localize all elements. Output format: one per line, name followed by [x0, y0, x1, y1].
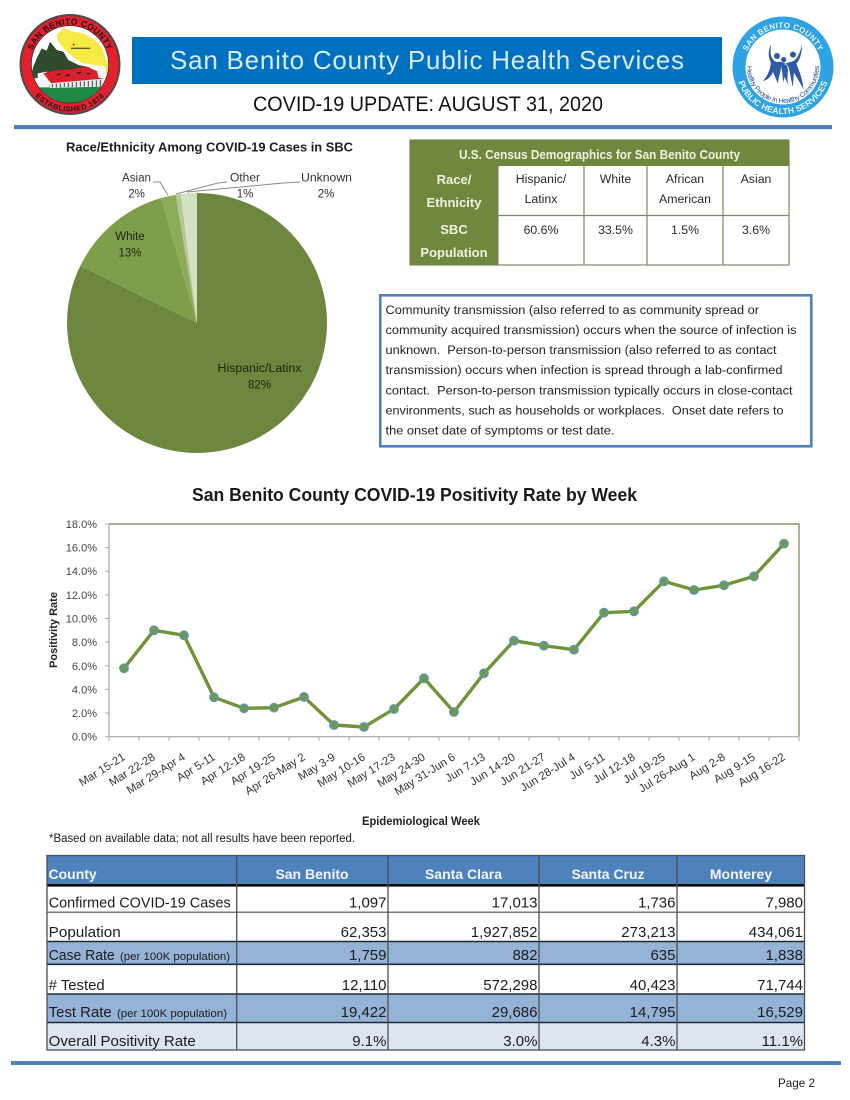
- x axis labels: May 24-30: [376, 751, 428, 790]
- table values: 1,736: [638, 894, 676, 912]
- table header row: Santa Cruz: [571, 866, 645, 882]
- table header row: County: [48, 866, 97, 882]
- census values: Hispanic/: [516, 172, 567, 186]
- table values: 29,686: [492, 1004, 538, 1021]
- panel: census demographics table: [410, 140, 789, 265]
- y axis labels: 12.0%: [66, 590, 97, 602]
- x axis labels: Jul 19-25: [621, 751, 668, 786]
- footnote: *Based on available data; not all results have been reported.: [49, 833, 355, 845]
- data markers: [120, 540, 788, 731]
- y axis labels: 10.0%: [66, 614, 97, 626]
- table values: 7,980: [765, 894, 803, 912]
- table values: 4.3%: [641, 1033, 676, 1050]
- y axis title: Positivity Rate: [48, 592, 60, 668]
- table row labels: (per 100K population): [120, 951, 230, 963]
- logo: San Benito County seal: [20, 14, 120, 115]
- table values: 11.1%: [762, 1033, 803, 1050]
- logo motto: Healthy People In Healthy Communities: [747, 66, 820, 103]
- y axis labels: 18.0%: [66, 519, 97, 531]
- x axis labels: May 17-23: [346, 751, 398, 790]
- table values: 62,353: [341, 924, 386, 941]
- census row headers: Race/: [437, 172, 472, 187]
- panel: pie chart: [66, 140, 354, 453]
- table row labels: Confirmed COVID-19 Cases: [49, 896, 231, 912]
- table values: 14,795: [630, 1004, 676, 1021]
- y axis labels: 0.0%: [72, 732, 97, 744]
- x axis labels: Mar 29-Apr 4: [125, 751, 188, 797]
- x axis labels: Apr 19-25: [229, 751, 278, 788]
- table values: 635: [650, 947, 676, 964]
- x axis labels: [77, 751, 788, 798]
- x axis labels: May 10-16: [316, 751, 368, 790]
- table row labels: (per 100K population): [117, 1008, 227, 1020]
- panel: transmission definitions text box: environments, such as households or workplaces. Onset date refers to: [386, 404, 784, 418]
- pie labels: 2%: [128, 188, 145, 200]
- pie labels: Asian: [122, 172, 151, 184]
- census values: Asian: [741, 172, 772, 186]
- table values: 71,744: [757, 977, 803, 994]
- table values: 1,838: [765, 947, 803, 964]
- pie labels: Hispanic/Latinx: [218, 363, 302, 375]
- table row labels: Overall Positivity Rate: [49, 1034, 196, 1050]
- table values: 17,013: [492, 894, 538, 912]
- panel: transmission definitions text box: the onset date of symptoms or test date.: [386, 424, 614, 438]
- pie labels: Unknown: [301, 172, 352, 184]
- table values: 572,298: [483, 977, 538, 994]
- table values: 882: [512, 947, 538, 964]
- pie labels: 1%: [237, 188, 253, 200]
- icon: three figures: [763, 44, 803, 89]
- subtitle: COVID-19 UPDATE: AUGUST 31, 2020: [253, 92, 603, 116]
- logo: Public Health Services seal: PUBLIC HEALTH SERVICES: [738, 80, 827, 114]
- y axis labels: 16.0%: [66, 543, 97, 555]
- census values: 3.6%: [742, 223, 770, 237]
- census row headers: Population: [420, 245, 488, 260]
- top divider rule: [14, 125, 832, 129]
- x axis labels: Jul 12-18: [591, 751, 638, 786]
- pie labels: 2%: [318, 188, 334, 200]
- x axis labels: May 3-9: [296, 751, 338, 783]
- y axis labels: [66, 519, 97, 744]
- pie labels: [115, 172, 352, 392]
- table header row: Santa Clara: [425, 866, 502, 882]
- table row labels: [49, 896, 231, 1050]
- table row labels: # Tested: [49, 978, 105, 994]
- table values: 16,529: [757, 1004, 803, 1021]
- table header row: Monterey: [710, 866, 772, 882]
- table values: 1,759: [349, 947, 386, 964]
- census row headers: SBC: [440, 222, 468, 237]
- x axis labels: Jun 28-Jul 4: [519, 751, 578, 794]
- x axis labels: Apr 5-11: [175, 751, 218, 784]
- page number: Page 2: [778, 1076, 815, 1090]
- pie labels: 13%: [118, 248, 142, 260]
- x axis labels: Jul 26-Aug 1: [637, 751, 698, 795]
- census row headers: Ethnicity: [427, 195, 482, 210]
- pie labels: Other: [230, 172, 260, 184]
- pie slices: [67, 193, 327, 453]
- plot frame and axes: [105, 524, 799, 741]
- pie leader lines: [153, 182, 300, 195]
- panel: county comparison table: [47, 856, 804, 1050]
- panel: transmission definitions text box: transmission) occurs when infection is spread through a lab-confirmed: [386, 363, 783, 377]
- x axis labels: Jun 14-20: [468, 751, 518, 788]
- census values: Latinx: [525, 192, 558, 206]
- x axis labels: Jun 21-27: [498, 751, 548, 788]
- census table heading: U.S. Census Demographics for San Benito County: [459, 148, 740, 162]
- title banner: San Benito County Public Health Services: [170, 45, 684, 75]
- table header row: [48, 866, 772, 882]
- table values: 9.1%: [352, 1033, 386, 1050]
- census values: African: [666, 172, 704, 186]
- census values: [516, 172, 772, 237]
- y axis labels: 2.0%: [72, 708, 97, 720]
- panel: transmission definitions text box: unknown. Person-to-person transmission (also referred to as contact: [386, 343, 777, 357]
- panel: transmission definitions text box: [380, 295, 811, 446]
- bottom divider rule: [11, 1061, 841, 1065]
- x axis labels: Jun 7-13: [444, 751, 488, 785]
- table values: 1,927,852: [471, 924, 538, 941]
- x axis title: Epidemiological Week: [362, 816, 481, 828]
- y axis labels: 14.0%: [66, 566, 97, 578]
- table values: 434,061: [749, 924, 803, 941]
- table values: 3.0%: [503, 1033, 538, 1050]
- pie labels: 82%: [248, 380, 271, 392]
- x axis labels: Mar 15-21: [77, 751, 128, 789]
- census values: White: [600, 172, 631, 186]
- table row fills: [47, 856, 804, 1050]
- census values: 33.5%: [598, 223, 633, 237]
- table row labels: Case Rate: [49, 948, 115, 964]
- x axis labels: Aug 16-22: [737, 751, 788, 789]
- table header row: San Benito: [275, 866, 349, 882]
- table values: 40,423: [630, 977, 676, 994]
- table values: 1,097: [349, 894, 386, 912]
- census values: American: [659, 192, 711, 206]
- x axis labels: May 31-Jun 6: [393, 751, 458, 798]
- census values: 60.6%: [524, 223, 558, 237]
- census values: 1.5%: [671, 223, 699, 237]
- seal ring text: SAN BENITO COUNTY: [28, 18, 113, 50]
- y axis labels: 4.0%: [72, 684, 97, 696]
- table values: 273,213: [621, 924, 676, 941]
- panel: transmission definitions text box: community acquired transmission) occurs when the source of infection is: [386, 323, 796, 337]
- table values: 19,422: [341, 1004, 386, 1021]
- census row headers: [420, 172, 488, 260]
- logo: Public Health Services seal: [732, 16, 834, 118]
- table row labels: Test Rate: [49, 1005, 112, 1021]
- panel: transmission definitions text box: contact. Person-to-person transmission typically occurs in close-contact: [386, 384, 793, 398]
- x axis labels: Jul 5-11: [568, 751, 608, 783]
- table values: 12,110: [342, 977, 386, 994]
- pie chart title: Race/Ethnicity Among COVID-19 Cases in SBC: [66, 140, 354, 154]
- table row labels: Population: [49, 925, 121, 941]
- x axis labels: Aug 9-15: [712, 751, 758, 786]
- table values: [341, 894, 803, 1050]
- x axis labels: Aug 2-8: [687, 751, 728, 783]
- title banner: [132, 37, 722, 84]
- panel: transmission definitions text box: Community transmission (also referred to as community spread or: [386, 303, 759, 317]
- x axis labels: Apr 26-May 2: [243, 751, 308, 798]
- logo ring text: SAN BENITO COUNTY: [743, 22, 824, 51]
- logo: San Benito County seal: ESTABLISHED 1874: [36, 92, 104, 112]
- x axis labels: Apr 12-18: [199, 751, 248, 788]
- data line: [124, 544, 784, 727]
- y axis labels: 6.0%: [72, 661, 97, 673]
- panel: positivity rate line chart: [48, 485, 799, 828]
- x axis labels: Mar 22-28: [107, 751, 158, 789]
- line chart title: San Benito County COVID-19 Positivity Rate by Week: [192, 485, 638, 505]
- table grid lines: [47, 856, 804, 1050]
- y axis labels: 8.0%: [72, 637, 97, 649]
- pie labels: White: [115, 231, 145, 243]
